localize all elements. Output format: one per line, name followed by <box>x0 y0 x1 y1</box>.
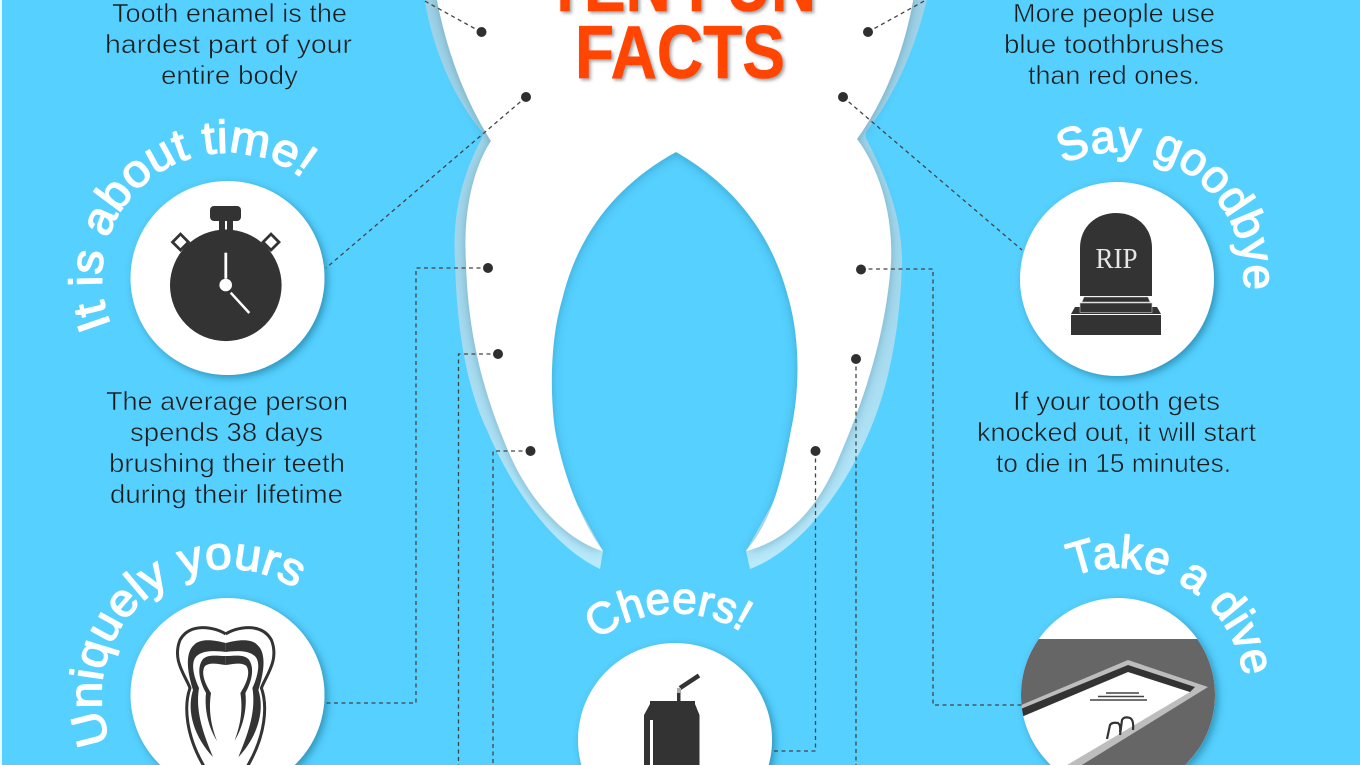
icon: nested tooth outlines <box>177 628 274 765</box>
fact: brushing time: The average person <box>106 386 348 416</box>
fact: blue toothbrushes: than red ones. <box>1028 60 1200 90</box>
circle: soda can <box>578 643 772 765</box>
fact: knocked-out tooth: If your tooth gets <box>1013 386 1220 416</box>
heading: cheers: Cheers! <box>586 589 754 634</box>
icon: gravestone <box>1071 213 1161 335</box>
tooth right edge band <box>746 0 928 569</box>
fact: knocked-out tooth <box>977 386 1257 478</box>
fact: tooth enamel <box>105 0 352 90</box>
tooth left edge band <box>424 0 603 569</box>
icon: stopwatch <box>170 206 282 341</box>
fact: blue toothbrushes: blue toothbrushes <box>1004 29 1224 59</box>
left edge strip <box>0 0 2 765</box>
icon: soda can <box>644 676 700 765</box>
dashed connectors <box>325 0 1022 765</box>
fact: tooth enamel: hardest part of your <box>105 29 352 59</box>
heading: uniquely yours: Uniquely yours <box>68 544 304 748</box>
heading: say goodbye: Say goodbye <box>1057 126 1270 288</box>
circle: gravestone <box>1020 182 1214 376</box>
circle: tooth layers <box>130 598 324 765</box>
heading: it is about time: It is about time! <box>68 118 318 332</box>
fact: brushing time: spends 38 days <box>130 417 323 447</box>
heading: take a dive: Take a dive <box>1064 534 1267 674</box>
icon: swimming pool <box>1021 639 1215 765</box>
fact: knocked-out tooth: to die in 15 minutes. <box>996 448 1231 478</box>
fact: blue toothbrushes <box>1004 0 1224 90</box>
tooth white body <box>436 0 914 551</box>
circle: swimming pool <box>1000 598 1225 765</box>
title <box>560 0 816 83</box>
fact: brushing time: during their lifetime <box>110 479 343 509</box>
fact: knocked-out tooth: knocked out, it will start <box>977 417 1257 447</box>
title line: facts: FACTS <box>575 10 785 94</box>
gravestone label: RIP <box>1096 244 1138 275</box>
tooth <box>424 0 928 569</box>
fact: tooth enamel: entire body <box>161 60 298 90</box>
fact: brushing time: brushing their teeth <box>109 448 345 478</box>
connector dots <box>476 27 873 456</box>
fact: brushing time <box>106 386 348 509</box>
circle: stopwatch <box>130 181 324 375</box>
